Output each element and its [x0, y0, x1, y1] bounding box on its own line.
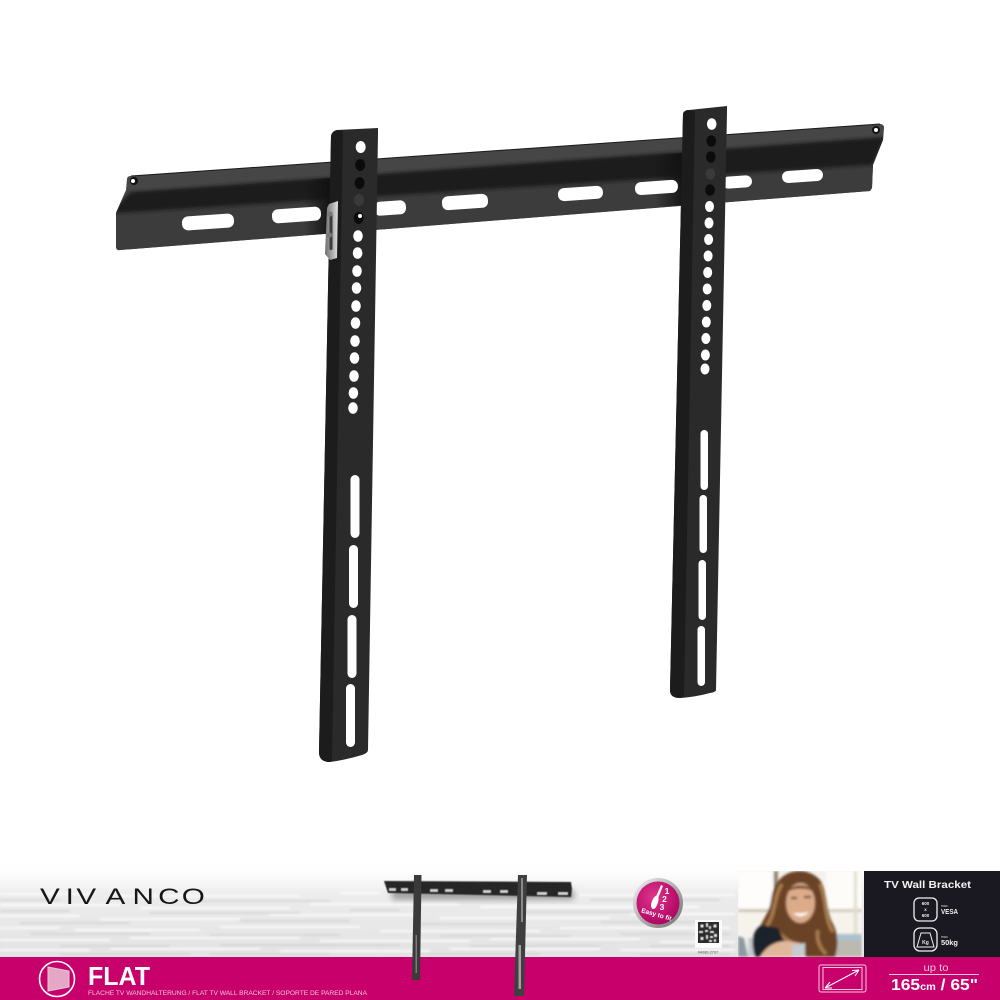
silver safety clip	[325, 201, 338, 260]
magenta footer bar	[0, 957, 1000, 1000]
panel heading: TV Wall Bracket	[884, 879, 972, 891]
VESA label: max.	[941, 904, 949, 908]
right upright arm	[670, 106, 727, 698]
left upright arm	[319, 128, 378, 762]
mini product photo	[384, 875, 574, 996]
subheading: FLACHE TV WANDHALTERUNG / FLAT TV WALL BRACKET / SOPORTE DE PARED PLANA	[88, 990, 368, 997]
flat mount icon	[40, 962, 74, 996]
weight icon: Kg	[922, 940, 929, 946]
screen size text	[889, 962, 979, 994]
horizontal wall rail	[110, 124, 885, 260]
easy to fit badge: 3	[660, 902, 665, 912]
VESA icon	[914, 898, 937, 921]
weight label: max.	[941, 935, 949, 939]
mini rail	[384, 881, 572, 897]
QR code	[695, 920, 722, 948]
VESA label: VESA	[941, 909, 958, 916]
screen size icon	[819, 965, 866, 992]
mini left arm	[412, 875, 422, 980]
VESA icon: x	[924, 907, 927, 912]
screen size text: 165cm / 65"	[891, 977, 978, 994]
mini bracket shadow	[392, 890, 574, 900]
footer wall texture band	[0, 860, 1000, 957]
main product photo: TV wall bracket	[110, 106, 885, 762]
VESA label	[941, 904, 958, 916]
mini right arm	[514, 875, 527, 996]
VIVANCO logo: VIVANCO	[40, 884, 205, 909]
heading FLAT: FLAT	[88, 961, 150, 991]
article number: #4080-2707	[698, 950, 718, 954]
dark spec panel	[864, 871, 1000, 957]
VESA icon: 600	[922, 901, 930, 906]
easy to fit badge: 2	[662, 894, 667, 904]
easy to fit badge: 1	[665, 886, 670, 896]
screen size text: up to	[924, 962, 949, 974]
easy to fit badge	[633, 878, 683, 928]
weight label: 50kg	[941, 940, 958, 947]
weight label	[941, 935, 958, 947]
lifestyle photo: woman with remote	[738, 871, 862, 957]
VESA icon: 600	[922, 913, 930, 918]
easy to fit badge: Easy to fit	[640, 907, 673, 923]
